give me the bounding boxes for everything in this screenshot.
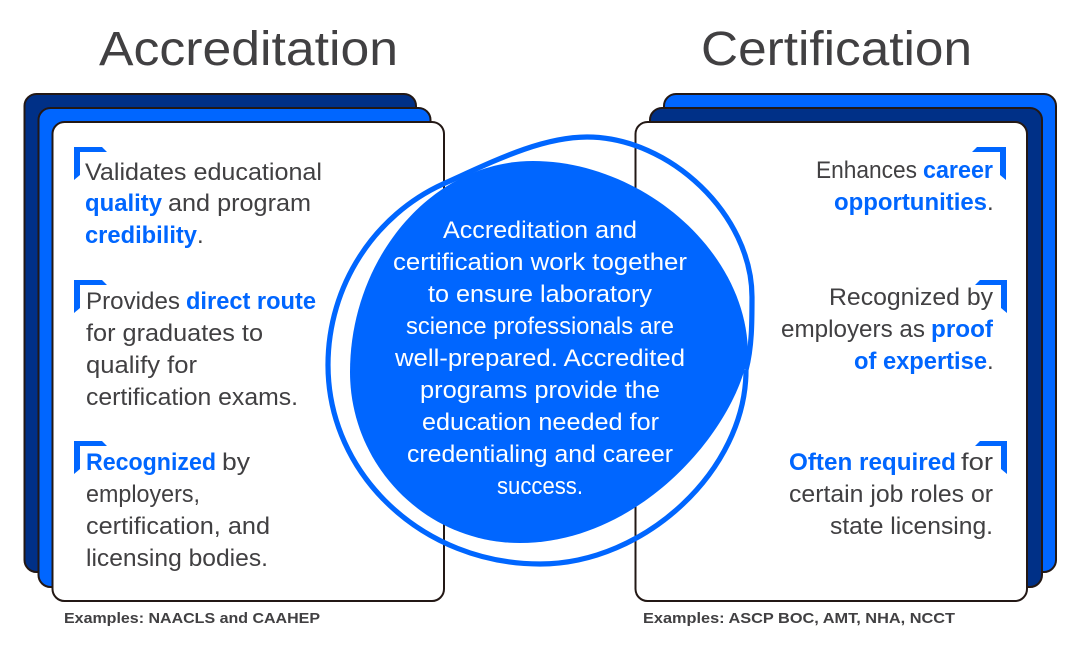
icon: right bracket 3 bbox=[975, 441, 1007, 474]
text: direct route bbox=[86, 288, 316, 411]
text: recognized by employers: by bbox=[222, 449, 250, 476]
text: central summary: certification work together bbox=[393, 249, 687, 276]
text: recognized by employers: Recognized bbox=[86, 449, 216, 476]
text: central summary: Accreditation and bbox=[443, 217, 637, 244]
icon: right bracket 1 bbox=[972, 147, 1006, 180]
text: proof of expertise: . bbox=[987, 348, 994, 375]
text: validates educational quality: . bbox=[197, 222, 204, 249]
text: often required: for bbox=[961, 449, 993, 476]
text: central summary bbox=[393, 217, 687, 500]
text: direct route: direct route bbox=[186, 288, 316, 315]
text: central summary: science professionals are bbox=[406, 313, 674, 340]
text: career opportunities bbox=[816, 157, 994, 216]
text: proof of expertise: Recognized by bbox=[829, 284, 993, 311]
text: direct route: qualify for bbox=[86, 352, 197, 379]
text: often required bbox=[789, 449, 993, 540]
text: proof of expertise: of expertise bbox=[854, 348, 987, 375]
text: central summary: programs provide the bbox=[420, 377, 660, 404]
text: central summary: education needed for bbox=[422, 409, 659, 436]
text: often required: state licensing. bbox=[830, 513, 993, 540]
text: recognized by employers: licensing bodies. bbox=[86, 545, 268, 572]
text: certification examples: Examples: ASCP BOC, AMT, NHA, NCCT bbox=[643, 610, 955, 627]
text: career opportunities: Enhances bbox=[816, 157, 917, 184]
panel: accreditation card stack bbox=[24, 94, 444, 601]
text: validates educational quality: and program bbox=[168, 190, 311, 217]
text: direct route: certification exams. bbox=[86, 384, 298, 411]
text: central summary: to ensure laboratory bbox=[428, 281, 652, 308]
text: proof of expertise: proof bbox=[931, 316, 994, 343]
text: validates educational quality bbox=[85, 159, 322, 249]
title: Certification: Certification bbox=[701, 23, 972, 76]
text: validates educational quality: quality bbox=[85, 190, 163, 217]
text: central summary: credentialing and career bbox=[407, 441, 673, 468]
text: central summary: well-prepared. Accredited bbox=[394, 345, 685, 372]
text: proof of expertise: employers as bbox=[781, 316, 925, 343]
text: direct route: for graduates to bbox=[86, 320, 263, 347]
icon: left bracket 1 bbox=[74, 147, 107, 180]
text: direct route: Provides bbox=[86, 288, 180, 315]
icon: left bracket 2 bbox=[74, 280, 107, 313]
text: validates educational quality: credibility bbox=[85, 222, 198, 249]
central circle with hand-drawn ring bbox=[328, 137, 752, 564]
text: central summary: success. bbox=[497, 473, 583, 500]
text: validates educational quality: Validates educational bbox=[85, 159, 322, 186]
panel: certification card stack bbox=[636, 94, 1056, 601]
text: career opportunities: career bbox=[923, 157, 993, 184]
text: often required: certain job roles or bbox=[789, 481, 993, 508]
text: proof of expertise bbox=[781, 284, 994, 375]
title: Accreditation: Accreditation bbox=[99, 23, 398, 76]
icon: right bracket 2 bbox=[975, 280, 1007, 313]
text: recognized by employers bbox=[86, 449, 270, 572]
text: accreditation examples: Examples: NAACLS and CAAHEP bbox=[64, 610, 320, 627]
text: recognized by employers: certification, and bbox=[86, 513, 270, 540]
text: career opportunities: . bbox=[987, 189, 994, 216]
icon: left bracket 3 bbox=[74, 441, 107, 474]
text: recognized by employers: employers, bbox=[86, 481, 200, 508]
text: often required: Often required bbox=[789, 449, 956, 476]
text: career opportunities: opportunities bbox=[834, 189, 987, 216]
